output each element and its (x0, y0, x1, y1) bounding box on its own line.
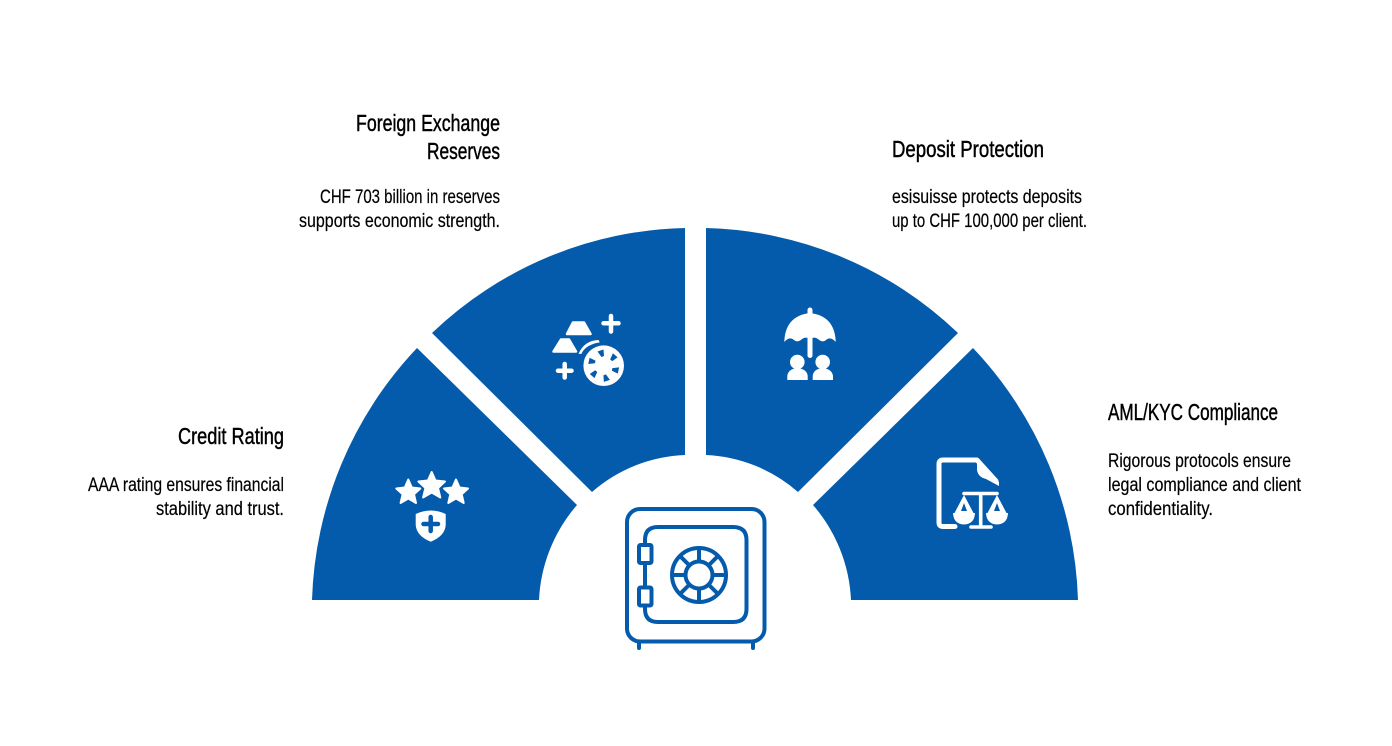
heading: foreign exchange reserves: Reserves (427, 138, 500, 164)
text: foreign exchange reserves description (299, 187, 500, 232)
segment: foreign exchange reserves (432, 228, 685, 492)
heading: credit rating: Credit Rating (178, 423, 284, 449)
icon: safe (627, 509, 764, 648)
icon: umbrella and people (784, 310, 836, 380)
text: credit rating description (88, 475, 284, 520)
text: AML/KYC description: confidentiality. (1108, 499, 1213, 520)
text: deposit protection description (892, 187, 1087, 232)
heading: AML/KYC compliance: AML/KYC Compliance (1108, 399, 1278, 425)
text: credit rating description: stability and trust. (156, 499, 284, 520)
text: deposit protection description: up to CHF 100,000 per client. (892, 211, 1087, 232)
text: foreign exchange reserves description: supports economic strength. (299, 211, 500, 232)
icon: document and scales (939, 459, 1008, 527)
icon: gold and coin (554, 316, 624, 386)
text: foreign exchange reserves description: CHF 703 billion in reserves (320, 187, 500, 208)
icon: stars and shield (396, 472, 468, 542)
segment: AML/KYC compliance (813, 348, 1078, 600)
text: credit rating description: AAA rating ensures financial (88, 475, 284, 496)
text: AML/KYC description: Rigorous protocols ensure (1108, 451, 1291, 472)
heading: deposit protection: Deposit Protection (892, 136, 1044, 162)
heading: foreign exchange reserves (356, 110, 500, 164)
segment: credit rating (312, 348, 577, 600)
heading: foreign exchange reserves: Foreign Exchange (356, 110, 500, 136)
text: AML/KYC description (1108, 451, 1302, 520)
text: AML/KYC description: legal compliance and client (1108, 475, 1302, 496)
segment: deposit protection (706, 228, 958, 492)
text: deposit protection description: esisuisse protects deposits (892, 187, 1082, 208)
